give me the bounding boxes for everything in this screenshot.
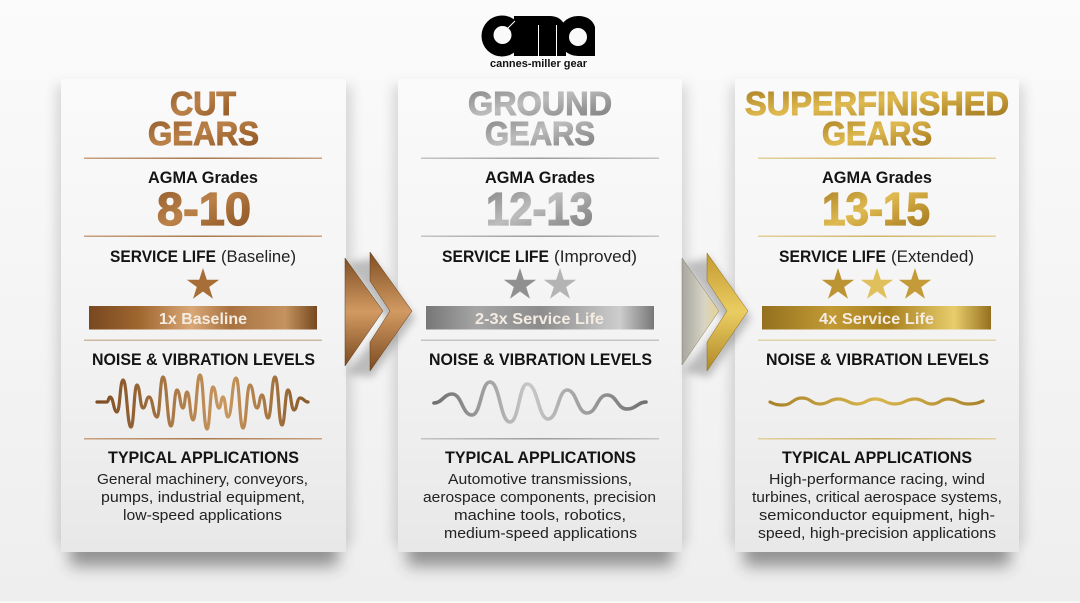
service life extended: (Extended)	[891, 247, 974, 266]
AGMA grades 12-13: 12-13	[486, 183, 593, 235]
AGMA grades 13-15: AGMA Grades	[822, 168, 932, 187]
typical applications	[423, 448, 656, 542]
heading: superfinished gears: GEARS	[822, 115, 932, 152]
bar: 4x service life	[762, 306, 991, 330]
noise wave: high	[97, 375, 308, 429]
service life baseline: (Baseline)	[221, 247, 296, 266]
AGMA grades 8-10: AGMA Grades	[148, 168, 258, 187]
heading: cut gears: CUT	[170, 85, 236, 122]
typical applications: TYPICAL APPLICATIONS	[108, 448, 299, 467]
logo: cannes-miller gear: cannes-miller gear	[490, 58, 588, 70]
typical applications: TYPICAL APPLICATIONS	[782, 448, 972, 467]
typical applications: High-performance racing, wind	[769, 471, 985, 488]
bar: 1x baseline: 1x Baseline	[159, 311, 247, 328]
bar: 2-3x service life: 2-3x Service Life	[475, 311, 604, 328]
typical applications: turbines, critical aerospace systems,	[752, 489, 1002, 506]
noise wave: medium	[434, 382, 646, 422]
typical applications: Automotive transmissions,	[448, 471, 632, 488]
AGMA grades 8-10: 8-10	[157, 183, 251, 235]
icon: one star	[187, 268, 219, 299]
typical applications: machine tools, robotics,	[454, 507, 626, 524]
service life improved: (Improved)	[554, 247, 637, 266]
typical applications	[97, 448, 308, 524]
typical applications: pumps, industrial equipment,	[101, 489, 305, 506]
typical applications: TYPICAL APPLICATIONS	[445, 448, 636, 467]
typical applications: aerospace components, precision	[423, 489, 656, 506]
heading: ground gears: GEARS	[485, 115, 595, 152]
panel: ground gears	[398, 79, 682, 552]
bar: 1x baseline	[89, 306, 317, 330]
service life improved	[442, 247, 637, 266]
arrow: cut to ground	[345, 252, 415, 377]
icon: two stars	[504, 268, 576, 299]
typical applications: medium-speed applications	[444, 525, 637, 542]
typical applications: low-speed applications	[123, 507, 282, 524]
icon: three stars	[822, 268, 931, 299]
AGMA grades 8-10	[148, 168, 258, 235]
arrow: ground to superfinished	[682, 253, 751, 377]
noise heading: NOISE & VIBRATION LEVELS	[766, 350, 989, 369]
AGMA grades 13-15: 13-15	[822, 183, 930, 235]
service life baseline	[110, 247, 296, 266]
typical applications: semiconductor equipment, high-	[759, 507, 995, 524]
typical applications: General machinery, conveyors,	[97, 471, 308, 488]
noise heading: NOISE & VIBRATION LEVELS	[429, 350, 652, 369]
service life extended: SERVICE LIFE	[779, 247, 886, 266]
service life improved: SERVICE LIFE	[442, 247, 549, 266]
typical applications: speed, high-precision applications	[758, 525, 996, 542]
panel: superfinished gears	[735, 79, 1019, 552]
heading: cut gears	[148, 85, 259, 152]
heading: ground gears	[468, 85, 612, 152]
logo: cannes-miller gear	[482, 16, 595, 70]
panel: cut gears	[61, 79, 346, 552]
noise heading: NOISE & VIBRATION LEVELS	[92, 350, 315, 369]
AGMA grades 12-13: AGMA Grades	[485, 168, 595, 187]
card shadows	[56, 85, 1024, 566]
service life extended	[779, 247, 974, 266]
noise wave: low	[770, 398, 983, 405]
service life baseline: SERVICE LIFE	[110, 247, 216, 266]
heading: ground gears: GROUND	[468, 85, 612, 122]
bar: 4x service life: 4x Service Life	[819, 311, 934, 328]
heading: superfinished gears	[745, 85, 1009, 152]
bar: 2-3x service life	[426, 306, 654, 330]
typical applications	[752, 448, 1002, 542]
heading: cut gears: GEARS	[148, 115, 259, 152]
heading: superfinished gears: SUPERFINISHED	[745, 85, 1009, 122]
